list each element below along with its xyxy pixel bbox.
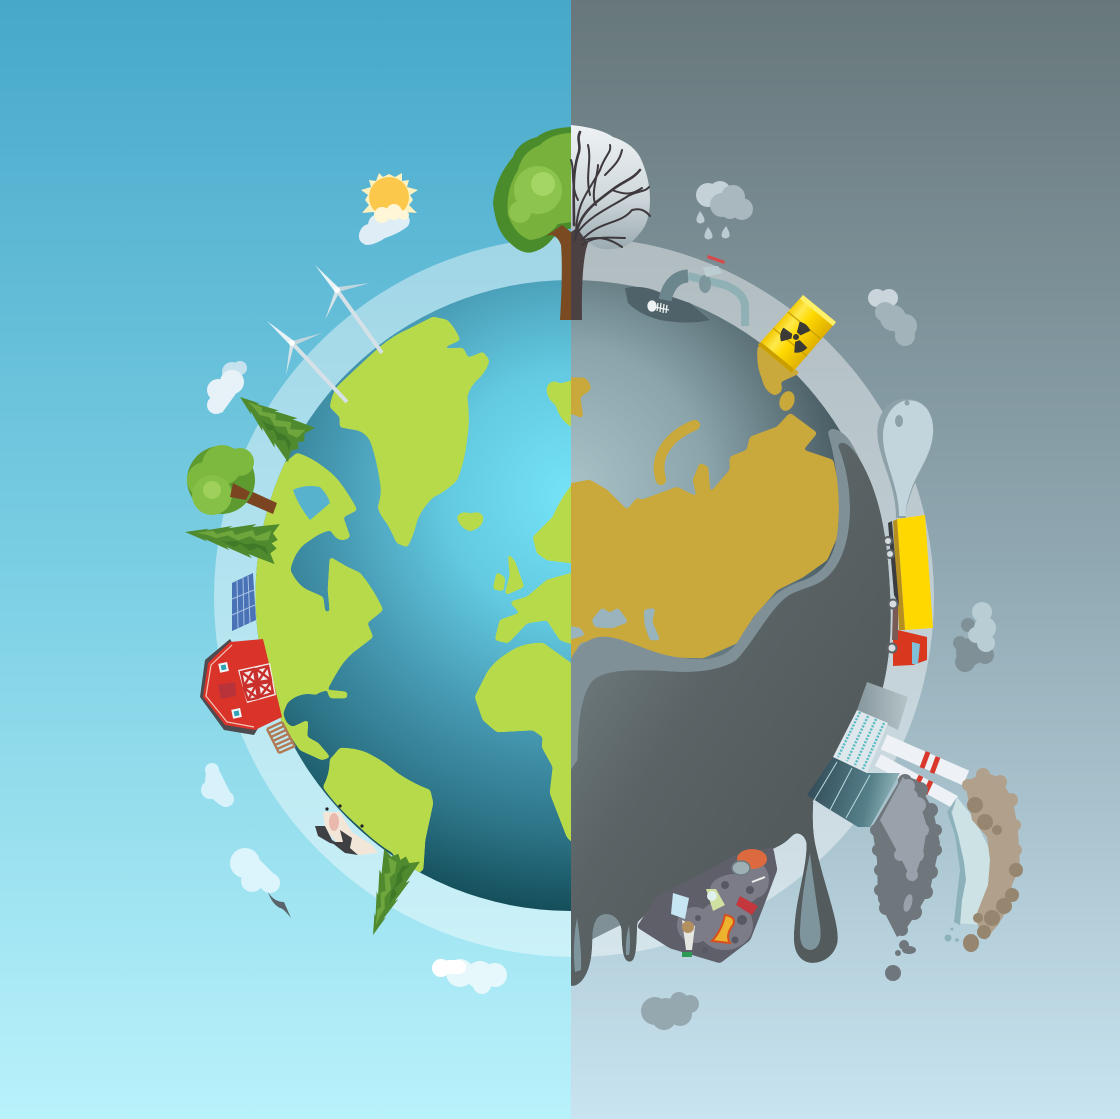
plant roof [857, 682, 908, 730]
windmill: lower [267, 321, 347, 402]
Greenland [330, 317, 489, 547]
radiation sign [774, 314, 819, 359]
oil: dark main body [550, 443, 890, 986]
barn windows [218, 662, 242, 719]
cloud: rain [696, 181, 753, 240]
barn [200, 639, 295, 753]
plant chimney upper [884, 742, 966, 778]
oil: outer lighter film [550, 429, 890, 960]
barn roof edge [200, 639, 260, 735]
windmill: upper [315, 265, 382, 353]
Britain [505, 553, 524, 595]
Ireland [493, 572, 505, 591]
smoke: grey plume [870, 774, 942, 981]
Svalbard right [571, 377, 590, 418]
barn steps [267, 722, 295, 753]
trash: bottle top [706, 889, 725, 911]
oil: small drip highlight [626, 925, 630, 955]
trash: paper [671, 893, 689, 919]
inland seas [571, 608, 660, 640]
trash: apple core [712, 915, 734, 943]
oil spill [550, 429, 890, 986]
Novaya Zemlya [659, 425, 695, 480]
cloud: upper right [868, 289, 917, 346]
conifer: middle left [182, 512, 280, 564]
green canopy [493, 127, 572, 253]
barn door [238, 663, 276, 703]
train smoke [877, 398, 934, 518]
background: clean sky [0, 0, 571, 1119]
cloud: bottom grey [641, 992, 699, 1030]
trash: white stick [752, 877, 765, 882]
red valve [707, 255, 725, 264]
cow [315, 804, 378, 855]
plant office block [833, 710, 888, 773]
continents: clean green land [256, 317, 571, 872]
cloud: lower left small [201, 763, 234, 807]
truck [884, 515, 933, 666]
plant cylinder base [807, 757, 900, 827]
North America [256, 453, 382, 761]
trash pile [637, 848, 777, 963]
oil: left drip highlight [574, 918, 581, 972]
Canadian lake [293, 486, 330, 520]
South America [323, 748, 433, 880]
cloud: lower left large [230, 848, 280, 893]
globe: clean half [256, 280, 571, 911]
trunk [546, 225, 571, 320]
raindrops [696, 211, 730, 240]
conifer: upper left [227, 380, 315, 462]
Svalbard left [547, 374, 595, 430]
Africa left [475, 642, 571, 842]
radioactive barrel [758, 295, 836, 413]
branch: bird silhouette [268, 892, 291, 918]
smoke: pale plume edge [944, 797, 966, 942]
tree: left leafy [187, 445, 277, 515]
oil: big drip highlight [800, 853, 821, 950]
Scandinavia left [533, 486, 571, 564]
barn wall [203, 639, 282, 730]
Eurasia [545, 413, 840, 660]
cloud puff [432, 959, 450, 977]
trash: orange bucket [737, 849, 767, 869]
truck wheels [884, 537, 898, 652]
solar panel [232, 573, 256, 631]
barn hay loft [218, 682, 236, 699]
globe: polluted half [571, 280, 891, 986]
smoke: pale plume [952, 797, 995, 925]
water puddle and fish skeleton [625, 287, 710, 322]
cloud: bottom white [432, 959, 507, 994]
trash: bottle [682, 920, 695, 950]
atmosphere ring [214, 237, 934, 957]
conifer: bottom [355, 849, 420, 942]
continents: polluted brown land [545, 377, 840, 660]
cloud: right side [953, 602, 996, 672]
Iceland [457, 513, 483, 531]
background: polluted sky [571, 0, 1120, 1119]
tree: half green half dead [493, 125, 650, 320]
power plant [807, 682, 966, 827]
smoke: brown plume [962, 768, 1023, 952]
plant chimney lower [878, 760, 955, 802]
Europe left [495, 573, 571, 644]
dead canopy [571, 125, 650, 249]
Caribbean islands [327, 690, 347, 698]
leaked brown sludge [758, 345, 800, 413]
trash: red box [736, 896, 758, 915]
icon: sun behind cloud [359, 173, 418, 245]
trash: metal ring [732, 861, 750, 875]
sun cloud [359, 204, 410, 245]
leaking tap pipe [665, 255, 745, 326]
dead branches [571, 132, 650, 247]
fish bones [648, 301, 669, 313]
cloud: upper left [207, 361, 247, 414]
